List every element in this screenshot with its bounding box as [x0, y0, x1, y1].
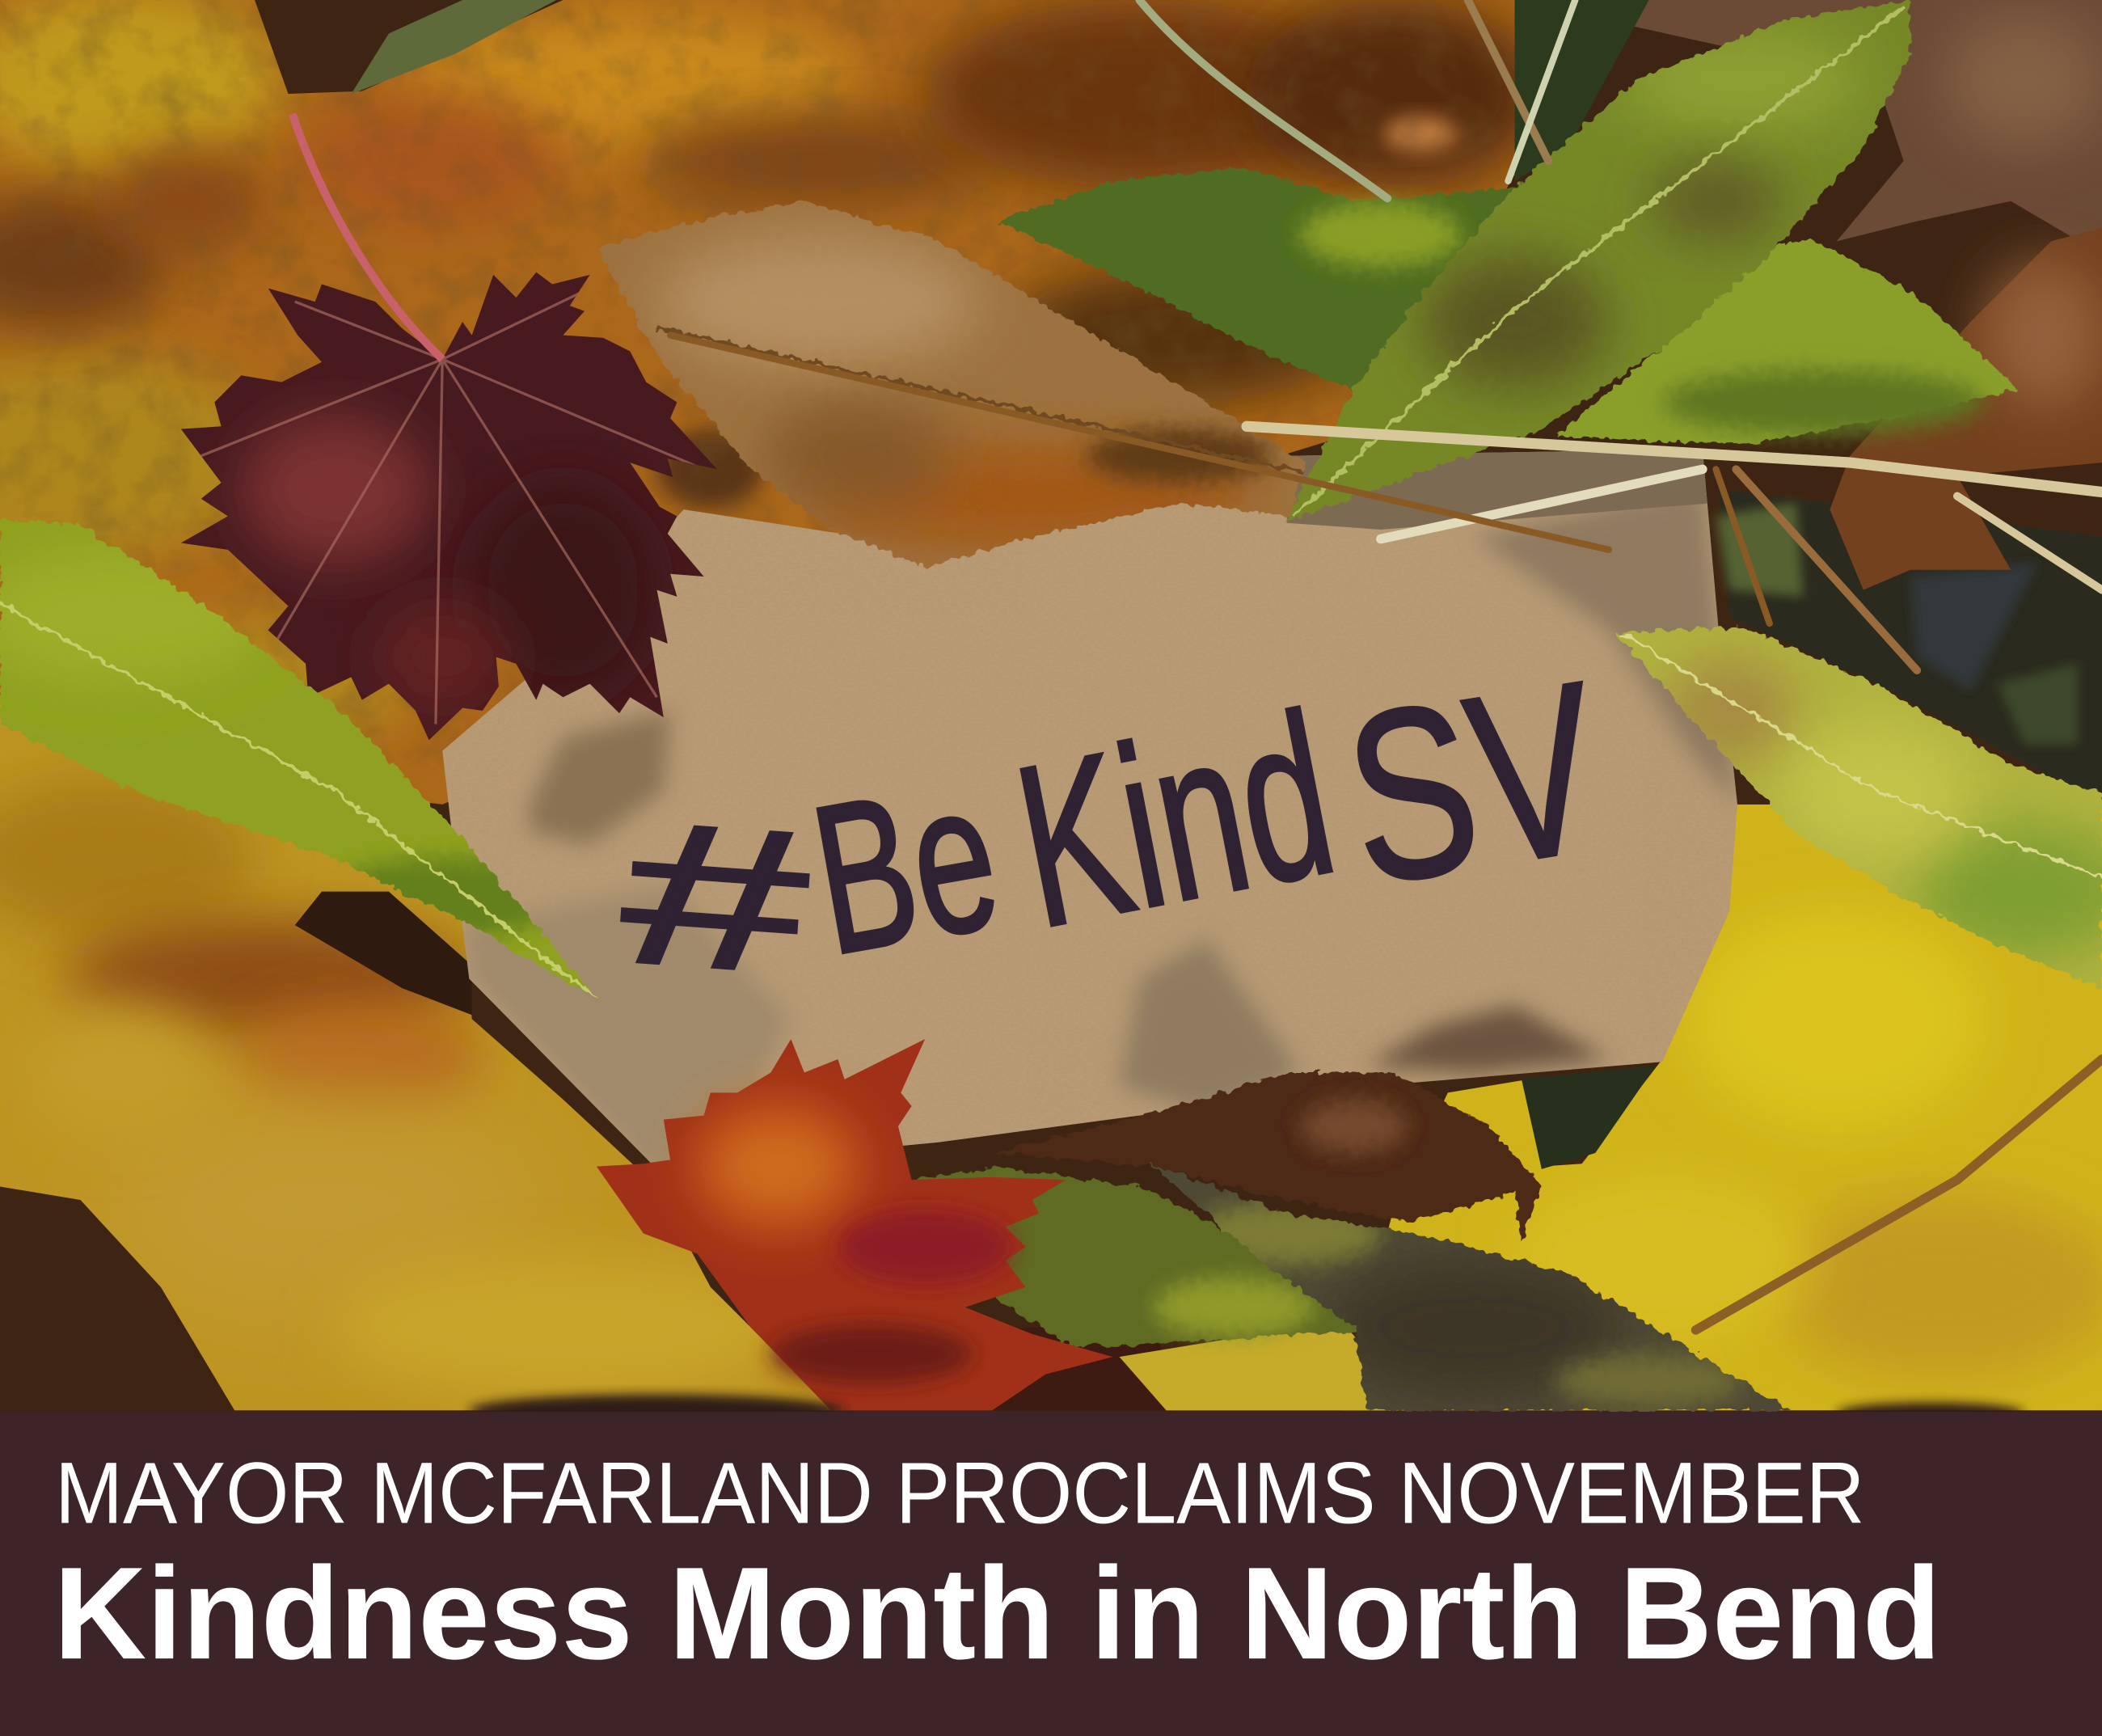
leaf: grey-green fragment at top edge: [351, 0, 556, 94]
handwriting: Kind: Kind: [999, 665, 1351, 976]
leaf: red-orange maple bottom: [597, 1039, 1112, 1410]
shadow: top-right on cardboard: [1475, 485, 1737, 805]
stain: water mark left: [530, 711, 670, 845]
leaf: dark red maple: [161, 261, 737, 758]
leaf: glossy dark brown bottom: [992, 1073, 1542, 1240]
leaf: dry brown top-right: [1515, 0, 2102, 255]
shadows along bottom edge of photo: [469, 1394, 2024, 1426]
leaf: yellow lower-left: [0, 684, 872, 1421]
shadow: center-bottom on cardboard: [1120, 939, 1300, 1113]
leaf: tan brown center: [590, 194, 1320, 577]
leaf: small yellow bottom: [1120, 1320, 1421, 1410]
shadow: top band above sign: [1287, 451, 1707, 530]
leaf: mottled dark: [1139, 1153, 1796, 1414]
leaf: large green spotted: [1273, 0, 1917, 530]
leaf: large orange and yellow top-left: [0, 0, 1542, 817]
shadow: lower-left on cardboard: [462, 885, 791, 1180]
stems: pale and brown twigs: [670, 0, 2102, 1330]
dark gap under cardboard: [1522, 1066, 1656, 1169]
dark gap left of cardboard: [295, 892, 472, 1015]
leaf: yellow-green right: [1609, 617, 2102, 992]
leaf: green and red bottom: [912, 1167, 1421, 1347]
handwriting: SV: SV: [1331, 631, 1617, 936]
handwriting: hash: #: [616, 779, 814, 1016]
dark red shadow area at bottom centre: [804, 1320, 1180, 1410]
banner subtitle: MAYOR MCFARLAND PROCLAIMS NOVEMBER: [55, 1444, 1865, 1542]
banner title: Kindness Month in North Bend: [53, 1540, 1941, 1687]
leaf: dark green top: [998, 167, 1515, 391]
banner: [0, 1412, 2102, 1736]
mottling on the large leaf: [0, 0, 1528, 817]
leaf: bright yellow lower-right: [1327, 791, 2102, 1421]
stem: pink maple stalk: [292, 114, 442, 359]
leaf: green lance left: [0, 509, 603, 1006]
leaf: green right back: [1555, 239, 2018, 446]
stain: water mark bottom-right: [1367, 1006, 1609, 1073]
handwriting: Be: Be: [798, 735, 1013, 999]
panel: cardboard sign: [429, 442, 1756, 1193]
leaf: reddish brown right edge: [1830, 228, 2102, 590]
dark undergrowth right of cardboard: [1716, 489, 2102, 805]
